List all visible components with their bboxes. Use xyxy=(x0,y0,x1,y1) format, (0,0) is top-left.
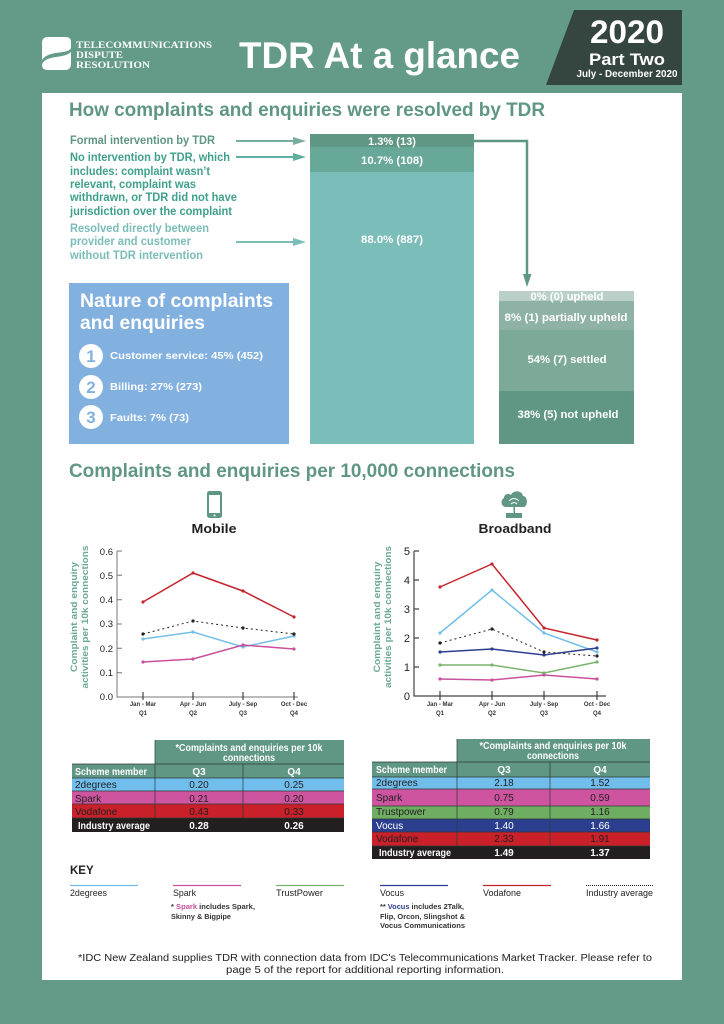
key legend xyxy=(70,886,654,899)
chart: broadband line chart: 4 xyxy=(404,575,410,587)
note: vocus xyxy=(380,902,466,930)
chart: mobile line chart: 0.1 xyxy=(100,668,113,679)
heading: how resolved: How complaints and enquiries were resolved by TDR xyxy=(69,100,545,121)
date badge xyxy=(546,10,682,85)
date badge: July - December 2020 xyxy=(576,69,678,80)
chart: broadband line chart: 5 xyxy=(404,546,410,558)
date badge: 2020 xyxy=(590,14,664,50)
chart: mobile line chart: Q2 xyxy=(189,711,198,717)
chart: mobile line chart xyxy=(100,547,308,717)
stacked bar: formal outcomes xyxy=(499,291,634,444)
key legend: TrustPower xyxy=(276,888,323,899)
chart: broadband line chart: July - Sep xyxy=(530,702,559,708)
logo: TELECOMMUNICATIONS xyxy=(76,41,212,51)
axis label: mobile: Complaint and enquiry xyxy=(69,562,79,672)
table: broadband: Q3 xyxy=(497,765,511,776)
label: no intervention xyxy=(69,152,237,218)
chart: broadband line chart: 2 xyxy=(404,633,410,645)
heading: mobile: Mobile xyxy=(192,521,236,536)
table: broadband: Spark xyxy=(376,793,403,804)
panel: nature of complaints: Billing: 27% (273) xyxy=(110,381,202,393)
table: mobile: Industry average xyxy=(78,821,150,832)
icon: broadband cloud xyxy=(502,491,527,518)
panel: nature of complaints: 3 xyxy=(86,408,96,427)
chart: mobile line chart: 0.3 xyxy=(100,619,113,630)
table: broadband: 1.40 xyxy=(494,821,514,832)
table: mobile xyxy=(72,740,344,832)
table: mobile: 0.33 xyxy=(284,807,304,818)
chart: broadband line chart: 1 xyxy=(404,662,410,674)
key legend: Spark xyxy=(173,888,196,899)
table: broadband: Vodafone xyxy=(376,834,419,845)
stacked bar: formal outcomes: 54% (7) settled xyxy=(528,354,606,366)
chart: broadband line chart: Oct - Dec xyxy=(584,702,611,708)
heading: per 10,000 connections: Complaints and enquiries per 10,000 connections xyxy=(69,461,515,482)
note: spark xyxy=(171,902,255,921)
table: mobile: Q4 xyxy=(287,767,301,778)
chart: mobile line chart: Q3 xyxy=(239,711,248,717)
logo: DISPUTE xyxy=(76,51,123,61)
table: broadband: connections xyxy=(527,751,579,762)
chart: broadband line chart: Q2 xyxy=(488,711,497,717)
footnote: *IDC New Zealand supplies TDR with connection data from IDC's Telecommunications Market Tracker. Please refer to xyxy=(78,952,652,964)
chart: mobile line chart: Apr - Jun xyxy=(180,702,206,708)
chart: mobile line chart: 0.5 xyxy=(100,571,113,582)
chart: broadband line chart: Apr - Jun xyxy=(479,702,505,708)
axis label: mobile xyxy=(69,546,90,688)
table: broadband: 0.59 xyxy=(590,793,610,804)
connector arrow xyxy=(474,141,532,287)
table: broadband: Q4 xyxy=(593,765,607,776)
table: broadband: 0.79 xyxy=(494,807,514,818)
axis label: broadband xyxy=(372,546,393,688)
table: mobile: Spark xyxy=(75,794,102,805)
logo xyxy=(42,37,212,71)
chart: mobile line chart: Q4 xyxy=(290,711,299,717)
panel: nature of complaints: Faults: 7% (73) xyxy=(110,412,189,424)
chart: mobile line chart: 0.0 xyxy=(100,692,113,703)
chart: mobile line chart: 0.4 xyxy=(100,595,113,606)
note: spark: Skinny & Bigpipe xyxy=(171,912,231,921)
axis label: mobile: activities per 10k connections xyxy=(80,546,90,688)
label: no intervention: jurisdiction over the complaint xyxy=(69,206,232,218)
chart: broadband line chart: 3 xyxy=(404,604,410,616)
table: mobile: 2degrees xyxy=(75,780,117,791)
icon: mobile phone xyxy=(207,491,222,518)
chart: broadband line chart: 0 xyxy=(404,691,410,703)
footnote xyxy=(78,952,652,976)
arrow: resolved directly xyxy=(236,238,306,246)
title: TDR At a glance xyxy=(239,35,520,76)
table: mobile: Scheme member xyxy=(75,767,147,778)
chart: mobile line chart: July - Sep xyxy=(229,702,258,708)
panel: nature of complaints: 1 xyxy=(86,347,96,366)
key legend: Vodafone xyxy=(483,888,521,899)
note: spark: * Spark includes Spark, xyxy=(171,902,255,911)
key heading: KEY xyxy=(70,865,94,877)
label: resolved directly: Resolved directly between xyxy=(70,223,209,235)
label: formal intervention: Formal intervention by TDR xyxy=(70,135,216,147)
note: vocus: ** Vocus includes 2Talk, xyxy=(380,902,464,911)
table: mobile: *Complaints and enquiries per 10k xyxy=(176,743,323,754)
note: vocus: Flip, Orcon, Slingshot & xyxy=(380,912,466,921)
table: broadband: Vocus xyxy=(376,821,403,832)
key legend: Vocus xyxy=(380,888,404,899)
label: resolved directly: provider and customer xyxy=(70,236,191,248)
table: broadband: 1.91 xyxy=(590,834,610,845)
logo: RESOLUTION xyxy=(76,61,150,71)
chart: broadband line chart: Q4 xyxy=(593,711,602,717)
panel: nature of complaints: Customer service: 45% (452) xyxy=(110,350,263,362)
table: broadband: 0.75 xyxy=(494,793,514,804)
table: mobile: 0.21 xyxy=(189,794,209,805)
table: mobile: connections xyxy=(223,753,275,764)
table: broadband: 2degrees xyxy=(376,778,418,789)
table: mobile: Vodafone xyxy=(75,807,118,818)
table: mobile: 0.26 xyxy=(284,821,304,832)
table: mobile: 0.20 xyxy=(284,794,304,805)
label: no intervention: includes: complaint wasn’t xyxy=(70,166,210,178)
arrow: no intervention xyxy=(236,153,306,161)
table: broadband: *Complaints and enquiries per 10k xyxy=(480,741,627,752)
stacked bar: all complaints: 88.0% (887) xyxy=(361,234,423,246)
table: broadband: Trustpower xyxy=(376,807,426,818)
axis label: broadband: activities per 10k connections xyxy=(383,546,393,688)
label: no intervention: No intervention by TDR, which xyxy=(70,152,230,164)
table: mobile: 0.20 xyxy=(189,780,209,791)
stacked bar: all complaints xyxy=(310,134,474,444)
chart: broadband line chart: Q3 xyxy=(540,711,549,717)
table: broadband xyxy=(372,739,650,859)
table: broadband: 1.52 xyxy=(590,778,610,789)
key legend: Industry average xyxy=(586,888,653,899)
axis label: broadband: Complaint and enquiry xyxy=(372,562,382,672)
key legend: 2degrees xyxy=(70,888,107,899)
stacked bar: formal outcomes: 0% (0) upheld xyxy=(530,291,604,303)
panel: nature of complaints: and enquiries xyxy=(80,313,205,334)
table: mobile: Q3 xyxy=(192,767,206,778)
table: mobile: 0.43 xyxy=(189,807,209,818)
table: broadband: Scheme member xyxy=(376,765,447,776)
table: mobile: 0.25 xyxy=(284,780,304,791)
table: mobile: 0.28 xyxy=(189,821,209,832)
chart: broadband line chart: Jan - Mar xyxy=(427,702,454,708)
chart: mobile line chart: Jan - Mar xyxy=(130,702,157,708)
table: broadband: 1.66 xyxy=(590,821,610,832)
table: broadband: 2.33 xyxy=(494,834,514,845)
table: broadband: 1.16 xyxy=(590,807,610,818)
footnote: page 5 of the report for additional reporting information. xyxy=(226,964,504,976)
chart: mobile line chart: 0.6 xyxy=(100,547,113,558)
table: broadband: 1.49 xyxy=(494,848,514,859)
label: resolved directly xyxy=(69,223,209,262)
chart: broadband line chart xyxy=(404,546,611,717)
chart: broadband line chart: Q1 xyxy=(436,711,445,717)
label: no intervention: relevant, complaint was xyxy=(70,179,196,191)
stacked bar: formal outcomes: 38% (5) not upheld xyxy=(518,409,618,421)
chart: mobile line chart: Q1 xyxy=(139,711,148,717)
table: broadband: 2.18 xyxy=(494,778,514,789)
white content panel xyxy=(42,93,682,980)
panel: nature of complaints xyxy=(69,283,289,444)
panel: nature of complaints: 2 xyxy=(86,378,96,397)
note: vocus: Vocus Communications xyxy=(380,921,465,930)
table: broadband: 1.37 xyxy=(590,848,610,859)
stacked bar: all complaints: 10.7% (108) xyxy=(361,155,423,167)
label: no intervention: withdrawn, or TDR did not have xyxy=(69,192,237,204)
arrow: formal xyxy=(236,137,306,145)
chart: mobile line chart: Oct - Dec xyxy=(281,702,308,708)
label: resolved directly: without TDR intervention xyxy=(69,250,203,262)
date badge: Part Two xyxy=(589,50,665,69)
stacked bar: formal outcomes: 8% (1) partially upheld xyxy=(504,312,628,324)
panel: nature of complaints: Nature of complaints xyxy=(80,291,273,312)
table: broadband: Industry average xyxy=(379,848,451,859)
heading: broadband: Broadband xyxy=(478,521,552,536)
chart: mobile line chart: 0.2 xyxy=(100,644,113,655)
stacked bar: all complaints: 1.3% (13) xyxy=(368,136,416,148)
